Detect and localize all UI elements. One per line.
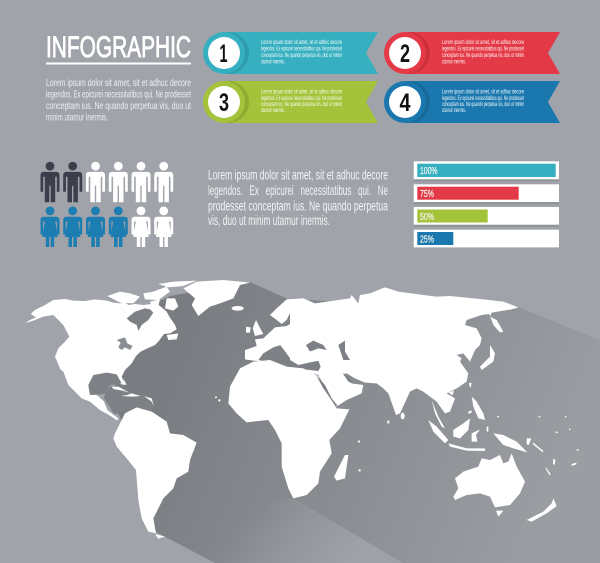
scandinavia xyxy=(270,298,305,324)
new guinea xyxy=(493,433,527,452)
taiwan and hainan xyxy=(448,383,472,395)
ribbon 3: conceptam ius. Ne quando perpetua vis, duo ut minim xyxy=(261,102,342,108)
caribbean sea xyxy=(104,385,154,414)
pacific and indian ocean islands xyxy=(358,410,579,475)
red sea xyxy=(316,375,338,407)
ribbon 3: legendos. Ex epicurei necessitatibus qui. Ne prodesset xyxy=(261,96,342,102)
ribbon 1: legendos. Ex epicurei necessitatibus qui. Ne prodesset xyxy=(261,46,342,52)
ribbon 2: Lorem ipsum dolor sit amet, sit et adhuc decore xyxy=(442,40,524,46)
bar chart: 50% xyxy=(420,211,434,223)
tasmania xyxy=(496,511,503,517)
ribbon 1: 1 xyxy=(220,40,228,68)
sumatra xyxy=(428,420,448,443)
philippines xyxy=(472,397,485,420)
pictogram: women xyxy=(40,206,173,247)
great lakes xyxy=(117,337,133,350)
africa xyxy=(228,360,349,498)
ribbon 2: legendos. Ex epicurei necessitatibus qui. Ne prodesset xyxy=(442,46,524,52)
centre text block: prodesset conceptam ius. Ne quando perpetua xyxy=(208,198,388,214)
centre text block: vis, duo ut minim utamur inermis. xyxy=(208,212,330,228)
sulawesi xyxy=(472,429,480,442)
madagascar xyxy=(334,455,348,481)
black sea xyxy=(306,341,327,352)
bar chart: 25% xyxy=(420,234,434,246)
centre text block: Lorem ipsum dolor sit amet, sit et adhuc decore xyxy=(208,166,388,182)
intro text block: Lorem ipsum dolor sit amet, sit et adhuc decore xyxy=(46,77,191,89)
ribbon 4: conceptam ius. Ne quando perpetua vis, duo ut minim xyxy=(442,102,524,108)
eastern mediterranean xyxy=(290,360,321,372)
centre text block xyxy=(208,166,388,228)
sri lanka xyxy=(401,413,405,419)
ribbon 3 xyxy=(203,81,378,123)
centre text block: legendos. Ex epicurei necessitatibus qui. Ne xyxy=(208,182,388,198)
ribbon 1: conceptam ius. Ne quando perpetua vis, duo ut minim xyxy=(261,53,342,59)
mediterranean xyxy=(258,345,307,372)
ribbon 3: Lorem ipsum dolor sit amet, sit et adhuc decore xyxy=(261,90,342,96)
greenland xyxy=(183,280,250,316)
persian gulf xyxy=(343,373,354,384)
europe xyxy=(245,303,310,370)
japan xyxy=(480,345,495,370)
ribbon 4: utamur inermis. xyxy=(442,108,466,114)
borneo xyxy=(453,418,470,438)
title: INFOGRAPHIC xyxy=(46,31,191,64)
iceland xyxy=(232,306,244,311)
intro text block: legendos. Ex epicurei necessitatibus qui. Ne prodesset xyxy=(46,88,191,100)
turkey xyxy=(298,350,323,363)
arctic islands xyxy=(107,281,197,340)
bar chart: 100% xyxy=(420,165,438,177)
intro text block: minim utamur inermis. xyxy=(46,112,108,124)
ribbon 1 xyxy=(203,32,378,74)
caspian sea xyxy=(338,341,350,360)
eurasia xyxy=(290,287,518,428)
gulf of mexico xyxy=(88,373,122,395)
ribbon 4: 4 xyxy=(400,89,411,117)
intro text block xyxy=(46,77,191,124)
ribbon 4: legendos. Ex epicurei necessitatibus qui. Ne prodesset xyxy=(442,96,524,102)
ribbon 2 xyxy=(384,32,560,74)
cuba and caribbean islands xyxy=(112,378,154,407)
ribbon 4: Lorem ipsum dolor sit amet, sit et adhuc decore xyxy=(442,90,524,96)
ribbon 1: utamur inermis. xyxy=(261,60,285,66)
hudson bay xyxy=(127,308,153,331)
intro text block: conceptam ius. Ne quando perpetua vis, duo ut xyxy=(46,100,191,112)
ribbon 2: utamur inermis. xyxy=(442,60,466,66)
ribbon 2: 2 xyxy=(400,40,410,68)
atlantic islands xyxy=(215,397,220,401)
north america xyxy=(25,299,177,421)
uk and ireland xyxy=(246,320,263,336)
south america xyxy=(113,407,197,533)
ribbon 2: conceptam ius. Ne quando perpetua vis, duo ut minim xyxy=(442,53,524,59)
new zealand xyxy=(527,498,557,522)
malay peninsula xyxy=(432,400,445,428)
bar chart xyxy=(414,161,559,247)
italy xyxy=(279,344,294,357)
australia xyxy=(453,453,525,507)
gulf of california xyxy=(60,369,68,387)
long map shadow xyxy=(115,282,600,563)
java xyxy=(448,443,485,451)
pictogram: men xyxy=(40,162,173,202)
bar chart: 75% xyxy=(420,188,434,200)
ribbon 3: utamur inermis. xyxy=(261,108,285,114)
ribbon 3: 3 xyxy=(219,89,229,117)
world map xyxy=(25,280,579,539)
ribbon 1: Lorem ipsum dolor sit amet, sit et adhuc decore xyxy=(261,40,342,46)
ribbon 4 xyxy=(384,81,560,123)
